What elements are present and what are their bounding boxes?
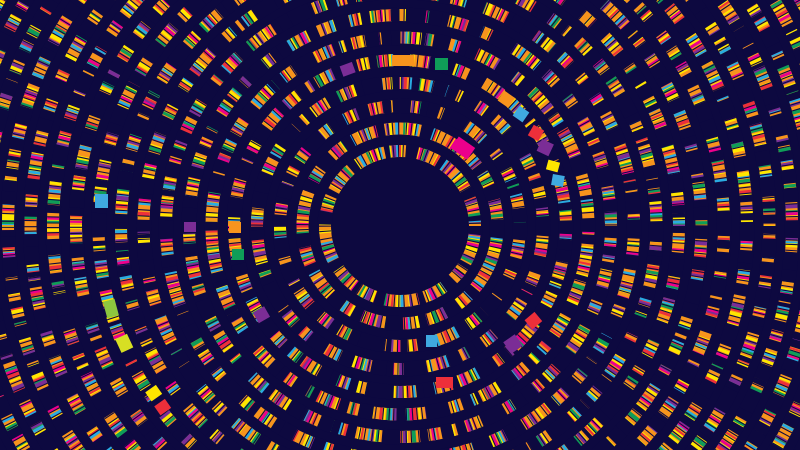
ring 4	[217, 43, 583, 409]
central disc	[332, 158, 468, 294]
solid sequence blocks	[95, 55, 565, 415]
ring 3	[245, 71, 555, 381]
ring 7	[105, 0, 695, 450]
ring 2	[273, 99, 527, 353]
ring 6	[134, 0, 666, 450]
ring 1	[295, 121, 505, 331]
ring 5	[169, 0, 631, 450]
ring 9	[92, 0, 708, 450]
